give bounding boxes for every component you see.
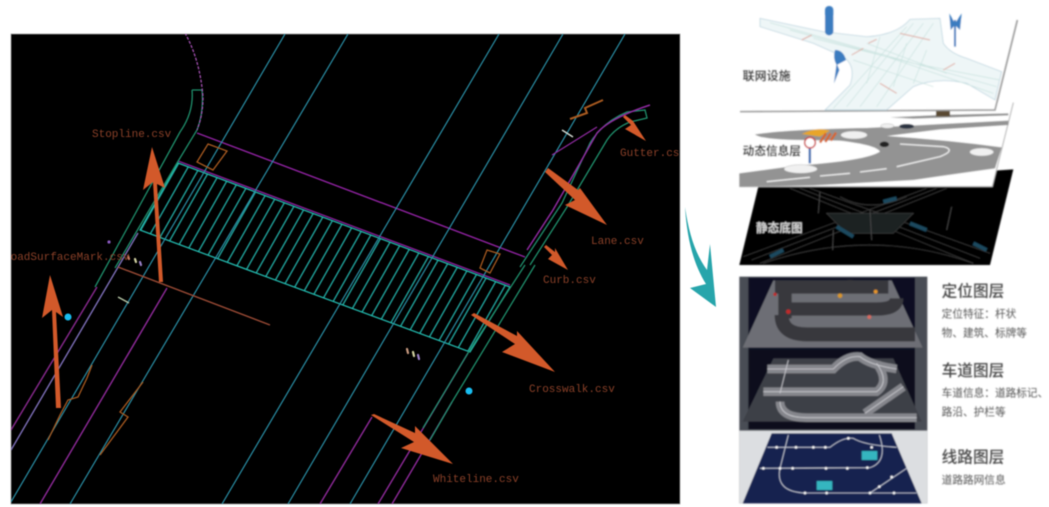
arrow: crosswalk [471,313,555,372]
text: route layer: 道路路网信息 [942,473,1006,486]
label: whiteline: Whiteline.csv [433,474,519,486]
arrow: gutter [623,115,646,141]
layer: connected infrastructure [740,6,1017,112]
label: road surface mark: RoadSurfaceMark.csv [4,252,130,264]
text: lane layer: 路沿、护栏等 [942,406,1006,419]
gutter dashed curves [185,33,650,250]
label: gutter: Gutter.csv [620,148,686,160]
text: positioning layer: 定位图层 [942,282,1004,301]
layer: lanes [743,356,922,422]
text: lane layer: 车道图层 [942,361,1004,380]
arrow: stopline [143,147,165,282]
layer: routes [739,431,927,503]
text: positioning layer [942,282,1027,340]
text: lane layer [942,361,1048,419]
layer: positioning [743,280,923,348]
lane lines [11,34,625,504]
crosswalk [140,161,510,352]
left purple road edges [11,233,468,504]
arrow: curb [544,245,568,270]
layer label: connected: 联网设施 [743,68,791,83]
stop line purple [197,133,525,257]
panel: map layer pyramid [739,277,1048,503]
text: route layer: 线路图层 [942,449,1004,467]
layer label: dynamic: 动态信息层 [743,144,801,158]
text: positioning layer: 物、建筑、标牌等 [942,327,1027,340]
arrow: teal pointer [685,207,716,307]
arrow: road surface mark [42,275,63,408]
label: crosswalk: Crosswalk.csv [529,384,615,396]
label: stopline: Stopline.csv [92,129,172,141]
layer: static base map [739,169,1013,265]
label: curb: Curb.csv [543,275,596,287]
small marks [64,130,573,394]
label: lane: Lane.csv [591,236,644,248]
panel: CAD map of intersection [4,33,686,504]
layer label: static: 静态底图 [756,221,803,235]
text: lane layer: 车道信息：道路标记、 [942,387,1048,400]
arrow: lane [545,168,607,225]
arrow: whiteline [371,414,453,464]
curb green lines [95,90,647,440]
layer: dynamic information [739,103,1013,187]
road surface marks [48,100,603,455]
text: positioning layer: 定位特征：杆状 [942,308,1017,321]
text: route layer [942,449,1006,486]
orange stop line [118,267,270,325]
panel: stacked map layers [739,6,1017,265]
